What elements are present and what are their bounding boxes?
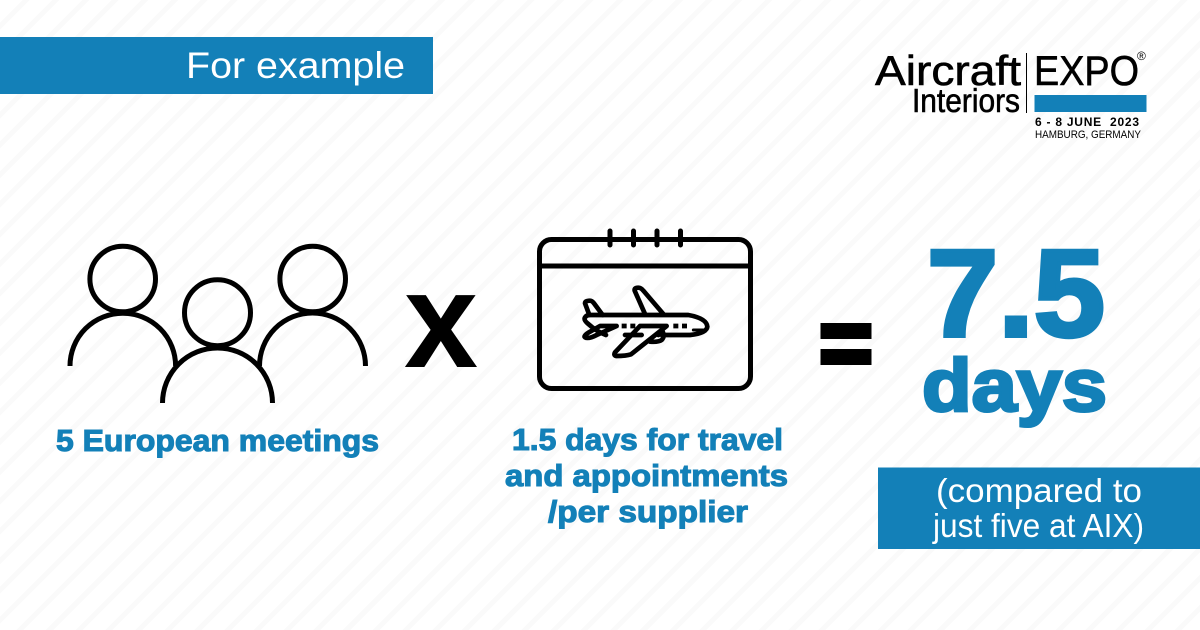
- logo: Aircraft Interiors EXPO: ®: [1137, 49, 1146, 63]
- callout: compared to just five at AIX: just five at AIX): [932, 507, 1144, 544]
- icon: calendar with plane: [540, 231, 750, 388]
- heading banner: For example: For example: [186, 45, 405, 86]
- equals sign: [820, 323, 872, 365]
- label: 5 European meetings: 5 European meetings: [56, 423, 379, 458]
- logo: Aircraft Interiors EXPO: [875, 47, 1146, 141]
- heading banner: For example: [0, 37, 433, 94]
- label: 1.5 days for travel and appointments per supplier: and appointments: [505, 458, 788, 493]
- callout: compared to just five at AIX: [878, 468, 1200, 549]
- logo: Aircraft Interiors EXPO: 6 - 8 JUNE 2023: [1035, 115, 1139, 129]
- icon: plane: [585, 288, 707, 356]
- multiply sign: x: [404, 244, 478, 396]
- big number: 7.5 days: [922, 225, 1107, 427]
- logo: Aircraft Interiors EXPO: EXPO: [1034, 47, 1139, 94]
- logo: Aircraft Interiors EXPO: Interiors: [912, 82, 1020, 119]
- label: 1.5 days for travel and appointments per supplier: [505, 422, 788, 529]
- logo: Aircraft Interiors EXPO: Aircraft: [875, 47, 1021, 94]
- icon: three people: [70, 246, 366, 403]
- callout: compared to just five at AIX: (compared to: [936, 472, 1142, 509]
- big number: 7.5 days: days: [922, 344, 1107, 427]
- logo: Aircraft Interiors EXPO: HAMBURG, GERMANY: [1035, 129, 1142, 141]
- label: 1.5 days for travel and appointments per supplier: 1.5 days for travel: [512, 422, 783, 457]
- label: 1.5 days for travel and appointments per supplier: /per supplier: [548, 494, 748, 529]
- big number: 7.5 days: 7.5: [927, 225, 1105, 363]
